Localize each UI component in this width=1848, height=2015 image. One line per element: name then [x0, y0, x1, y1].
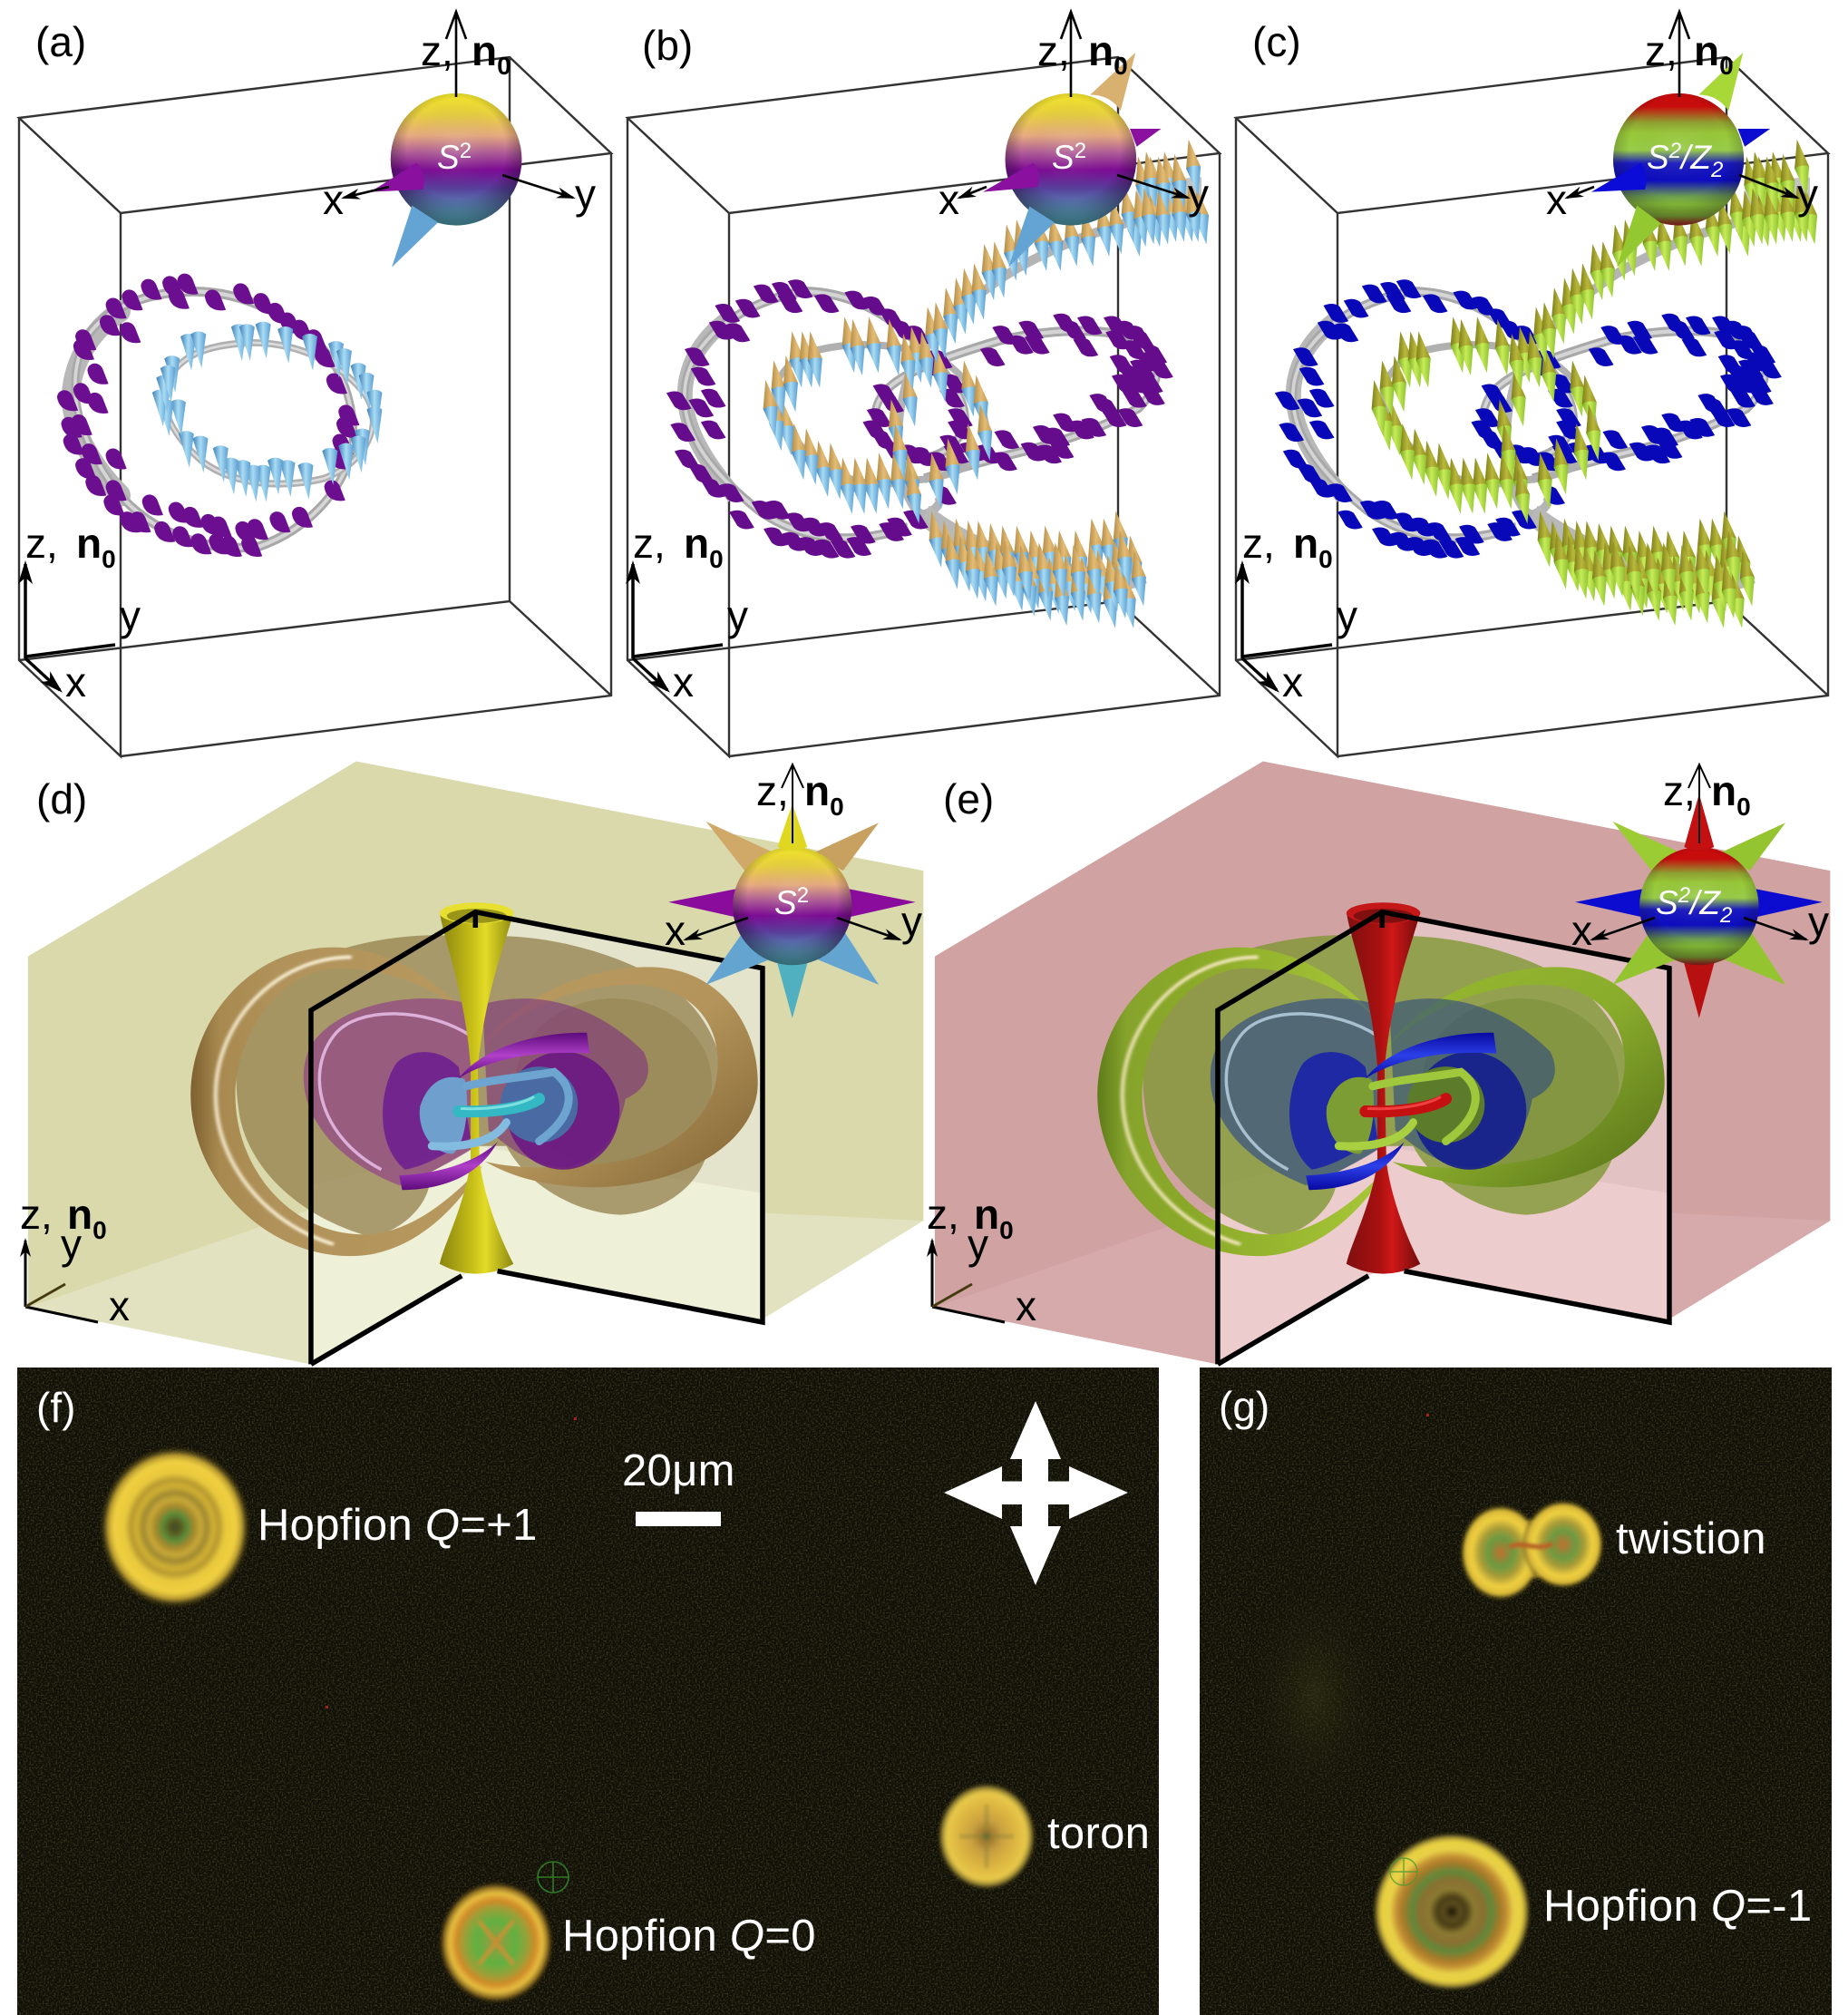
axis label x: x [665, 907, 686, 954]
axis label x: x [1571, 907, 1592, 954]
panel letter b: (b) [642, 22, 693, 69]
green lobes [1327, 1077, 1374, 1154]
micrograph background f [17, 1368, 1159, 2015]
pale purple ring [319, 1014, 471, 1170]
axis label z n0: 0 [1736, 793, 1751, 821]
blue lobes [420, 1077, 467, 1154]
axis label x: x [939, 176, 959, 223]
axis label y: y [1797, 170, 1818, 218]
red spindle [1347, 905, 1420, 1274]
order-parameter sphere b [983, 53, 1161, 268]
sphere axes e [1592, 764, 1806, 939]
purple tube upper [459, 1033, 589, 1078]
sensor noise g [1200, 1368, 1832, 2015]
sphere label S2: S [437, 139, 460, 176]
spindle cap inner [1354, 909, 1413, 923]
wireframe box c [1236, 57, 1828, 756]
sphere axes a [344, 12, 573, 198]
blue tube lower [1306, 1142, 1405, 1190]
micrograph background g [1200, 1368, 1832, 2015]
green target mark [1390, 1858, 1417, 1885]
hot pixel [1426, 1414, 1429, 1416]
blue tubes [432, 1072, 569, 1146]
dark blue lobe left [1289, 1052, 1377, 1170]
purple tube lower [399, 1142, 498, 1190]
axis label z n0: z, [1037, 27, 1070, 74]
panel letter d: (d) [36, 775, 87, 823]
purple cones a [67, 284, 348, 547]
green inner lobe [1422, 998, 1619, 1168]
right blue lobe [1389, 998, 1555, 1168]
label hopfion Q=0: Hopfion Q=0 [562, 1912, 816, 1961]
panel: (d) nested preimages in yellow box [20, 762, 923, 1364]
corner axes a: x [65, 658, 86, 706]
spindle cap [1347, 902, 1420, 924]
wireframe box a [19, 57, 611, 756]
dark purple lobe right [506, 1052, 619, 1170]
axis label y: y [1808, 898, 1829, 945]
panel: (a) linked loops in a wireframe box [19, 12, 611, 756]
axis label y: y [901, 898, 922, 945]
corner axes b [633, 520, 748, 706]
panel: (e) nested preimages in pink box [927, 762, 1830, 1364]
green target mark [538, 1862, 569, 1893]
left torus highlight [1123, 958, 1259, 1244]
axis label z n0: 0 [830, 793, 844, 821]
vector field knot b [679, 168, 1201, 600]
sphere label S2/Z2: /Z [1678, 139, 1712, 176]
yellow spindle top [440, 905, 513, 1274]
vector field knot c [1288, 168, 1810, 600]
hopfion Q=+1 texture [99, 1446, 251, 1609]
pale ring [1226, 1014, 1377, 1170]
corner axes d: x [109, 1282, 130, 1329]
axis label z n0: n [1088, 27, 1114, 74]
blue cones a [160, 340, 374, 483]
hot pixels [326, 1417, 577, 1708]
order-parameter sphere a [370, 93, 521, 268]
label 20 micron: 20μm [622, 1446, 735, 1495]
axis label y: y [575, 170, 596, 218]
sphere label S2: S [1052, 139, 1075, 176]
sphere axes d [686, 764, 900, 939]
panel letter g: (g) [1219, 1383, 1269, 1430]
sphere label S2/Z2: 2 [1719, 903, 1732, 928]
panel letter c: (c) [1252, 18, 1301, 65]
panel: (f) polarizing micrograph [17, 1368, 1159, 2015]
corner axes a: n [76, 520, 102, 567]
tan inner lobe [515, 998, 712, 1168]
corner axes a: 0 [102, 545, 116, 573]
hopfion Q=-1 texture [1372, 1832, 1532, 1991]
axis label z n0: n [472, 27, 497, 74]
axis label z n0: n [804, 767, 830, 814]
corner axes d: n [67, 1191, 92, 1238]
green lobe right [1407, 1066, 1484, 1143]
corner axes e [927, 1191, 1036, 1329]
corner axes d: z, [20, 1191, 53, 1238]
axis label z n0: 0 [1114, 52, 1128, 80]
label hopfion Q=-1: Hopfion Q=-1 [1543, 1882, 1812, 1931]
purple translucent lobes [304, 998, 477, 1185]
label toron: toron [1047, 1809, 1150, 1858]
corner axes d [20, 1191, 130, 1329]
green and red tubes [1338, 1072, 1475, 1146]
order-parameter sphere e [1575, 794, 1823, 1018]
blue tube upper [1366, 1033, 1496, 1078]
wireframe box b [627, 57, 1220, 756]
twistion texture [1459, 1499, 1605, 1601]
spindle cap inner [447, 909, 506, 923]
sensor noise f [17, 1368, 1159, 2015]
vector field loops a [67, 284, 374, 548]
axis label y: y [1188, 170, 1209, 218]
right purple lobe [482, 998, 648, 1168]
right green torus [1384, 967, 1665, 1187]
order-parameter sphere d [668, 803, 916, 1018]
panel: (b) torus knot vector field [627, 12, 1220, 756]
left green torus [1097, 948, 1389, 1256]
box e [935, 762, 1830, 1364]
sphere label S2/Z2: 2 [1678, 883, 1690, 908]
sphere label S2: S [774, 884, 797, 921]
order-parameter sphere c [1591, 53, 1770, 268]
blue translucent lobes [1211, 998, 1384, 1185]
axis label z n0: n [1694, 27, 1719, 74]
corner axes d: y [61, 1221, 82, 1268]
panel letter f: (f) [36, 1384, 75, 1431]
panel: (c) torus knot vector field, S2/Z2 colours [1236, 12, 1828, 756]
sphere label S2/Z2: 2 [1710, 158, 1723, 182]
outer tube [71, 291, 373, 548]
right tan torus [477, 967, 758, 1187]
axis label z n0: z, [1645, 27, 1678, 74]
3D scene e [935, 762, 1830, 1364]
sphere label S2/Z2: 2 [1668, 139, 1681, 163]
black frame d [311, 912, 763, 1364]
axis label z n0: z, [421, 27, 453, 74]
box d [28, 762, 923, 1364]
label hopfion Q=+1: Hopfion Q=+1 [258, 1501, 538, 1550]
black frame e [1218, 912, 1669, 1364]
dark purple lobe left [383, 1052, 471, 1170]
sphere label S2: 2 [1075, 139, 1086, 163]
sphere axes c [1567, 12, 1797, 198]
corner axes d: 0 [92, 1216, 107, 1244]
sphere label S2: 2 [797, 883, 809, 908]
axis label z n0: 0 [1719, 52, 1734, 80]
polarizer cross [944, 1401, 1128, 1585]
corner axes a: z, [25, 520, 58, 567]
translucent tan surfaces [237, 935, 725, 1236]
axis label z n0: n [1711, 767, 1736, 814]
axis label z n0: z, [1663, 767, 1696, 814]
sphere label S2/Z2: S [1656, 884, 1678, 921]
3D scene d [28, 762, 923, 1364]
faint haze [1233, 1560, 1396, 1832]
label twistion: twistion [1616, 1514, 1766, 1563]
spindle cap [440, 902, 513, 924]
left tan torus [190, 948, 482, 1256]
sphere label S2/Z2: /Z [1688, 884, 1721, 921]
axis label x: x [323, 176, 344, 223]
panel: (g) polarizing micrograph [1200, 1368, 1832, 2015]
left torus highlight [216, 958, 352, 1244]
sphere label S2: 2 [460, 139, 472, 163]
axis label z n0: z, [756, 767, 789, 814]
toron texture [937, 1782, 1036, 1891]
axis label x: x [1546, 176, 1567, 223]
panel letter e: (e) [943, 775, 994, 823]
dark blue lobe right [1413, 1052, 1526, 1170]
sphere axes b [959, 12, 1188, 198]
axis label z n0: 0 [497, 52, 511, 80]
translucent green surfaces [1143, 935, 1631, 1236]
corner axes a: y [120, 592, 141, 639]
sphere label S2/Z2: S [1647, 139, 1669, 176]
corner axes c [1242, 520, 1357, 706]
scale bar [636, 1512, 721, 1526]
panel letter a: (a) [35, 18, 86, 65]
blue lobe right [501, 1066, 578, 1143]
hopfion Q=0 texture [438, 1881, 554, 2004]
corner axes a [25, 520, 141, 706]
